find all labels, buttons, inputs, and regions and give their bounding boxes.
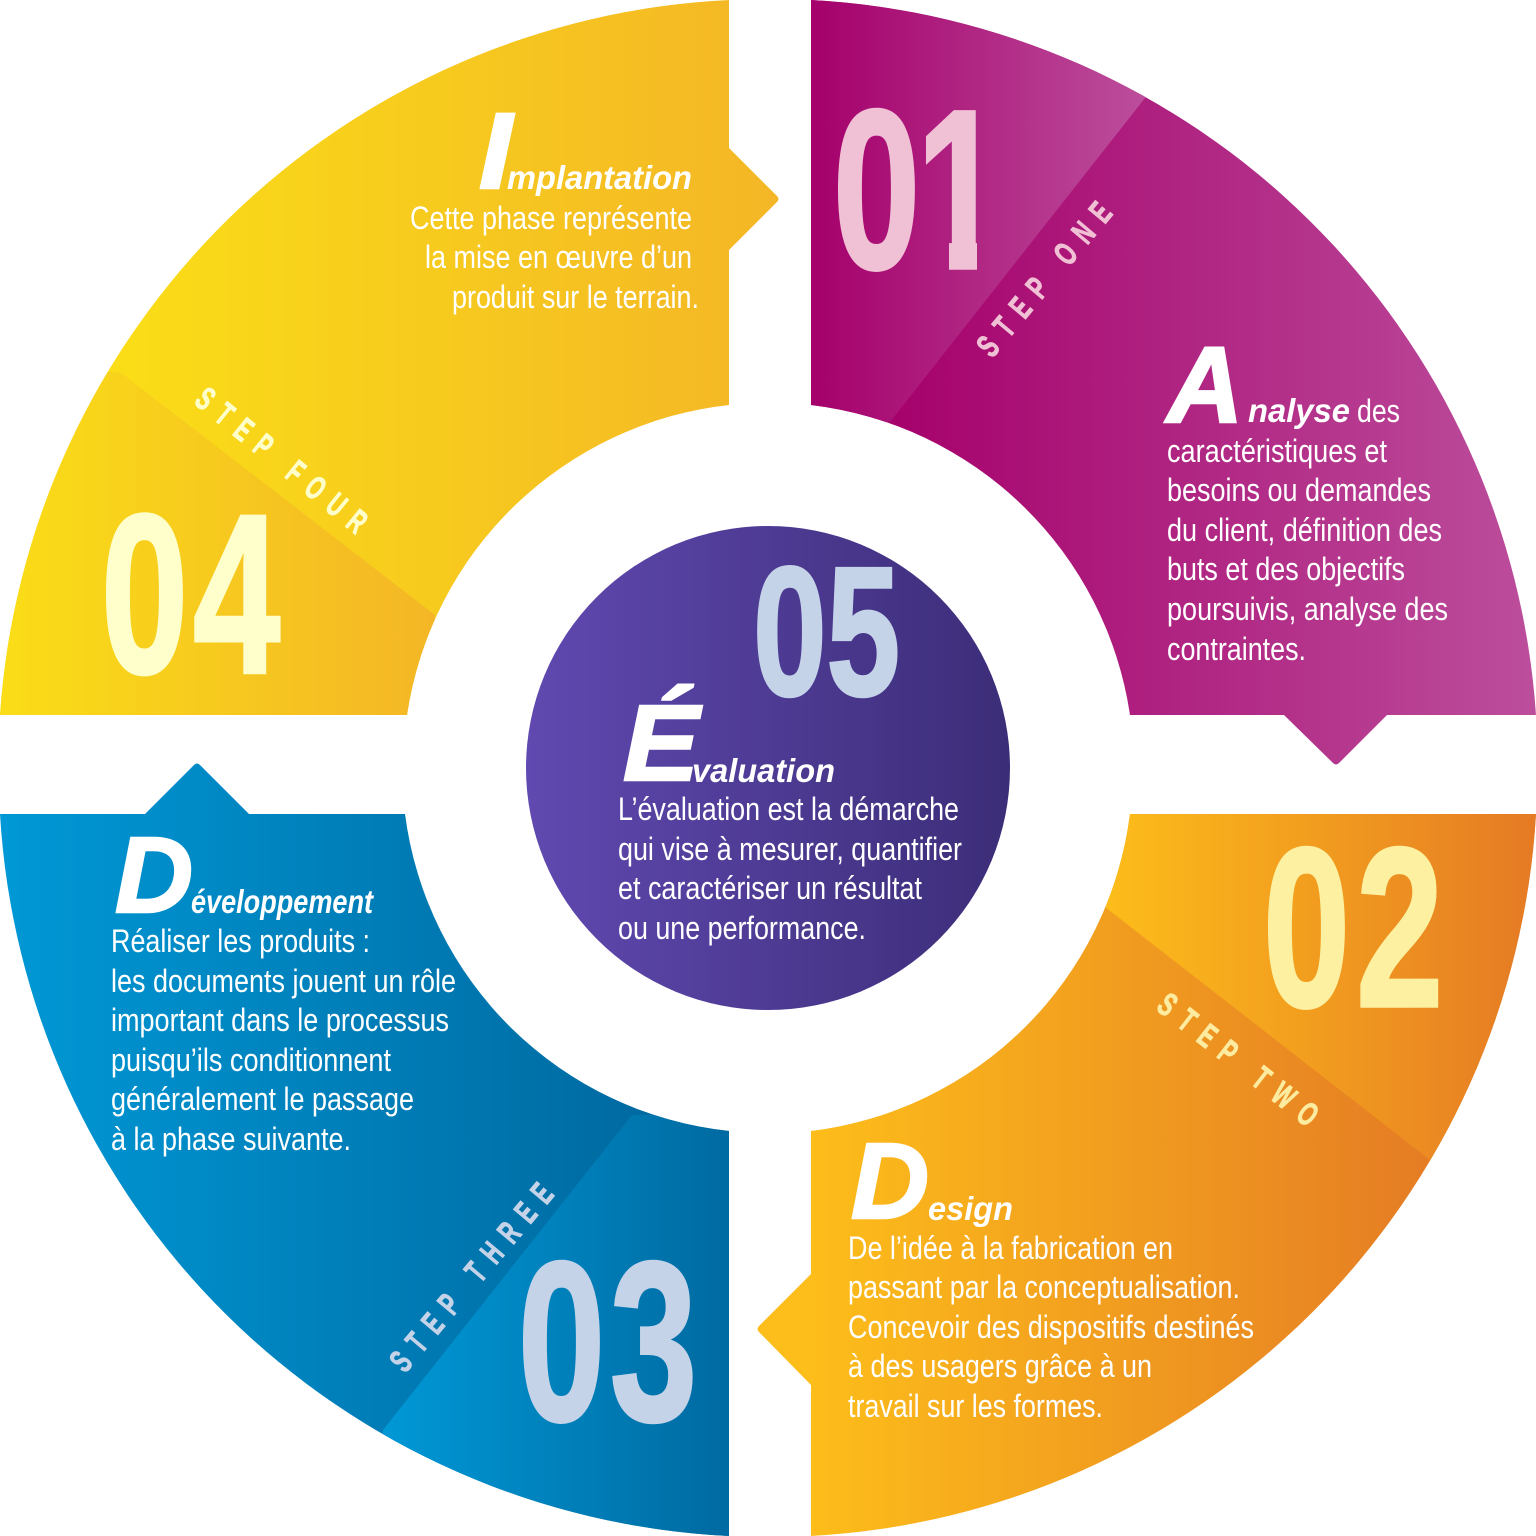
- text block evaluation: L’évaluation est la démarche: [618, 791, 959, 827]
- segment shape three: [0, 764, 729, 1536]
- panel: step four, implantation: [0, 0, 778, 721]
- text block analyse: caractéristiques et: [1167, 433, 1387, 469]
- number 01: 01: [833, 63, 1004, 317]
- heading analyse: A: [1164, 324, 1243, 445]
- heading evaluation: valuation: [692, 752, 835, 789]
- text block evaluation: et caractériser un résultat: [618, 870, 922, 906]
- text block evaluation: [618, 791, 962, 946]
- heading analyse: des: [1357, 393, 1400, 429]
- text block analyse: besoins ou demandes: [1167, 472, 1431, 508]
- text block implantation: Cette phase représente: [410, 200, 692, 236]
- text block design: travail sur les formes.: [848, 1388, 1103, 1424]
- heading analyse: [1164, 324, 1400, 445]
- text block evaluation: ou une performance.: [618, 910, 866, 946]
- text block evaluation: qui vise à mesurer, quantifier: [618, 831, 962, 867]
- text block analyse: buts et des objectifs: [1167, 551, 1405, 587]
- lighter band four: [0, 372, 435, 715]
- text block developpement: à la phase suivante.: [111, 1121, 351, 1157]
- panel: step three, developpement: [0, 764, 729, 1536]
- lighter band one: [811, 0, 1145, 422]
- number 05: 05: [753, 529, 900, 734]
- heading evaluation: [623, 682, 835, 803]
- heading design: esign: [928, 1190, 1013, 1227]
- text block developpement: les documents jouent un rôle: [111, 963, 456, 999]
- text block design: [848, 1230, 1254, 1424]
- heading evaluation: É: [623, 682, 702, 803]
- text block developpement: généralement le passage: [111, 1081, 414, 1117]
- text block implantation: produit sur le terrain.: [452, 279, 699, 315]
- text block design: De l’idée à la fabrication en: [848, 1230, 1173, 1266]
- heading implantation: I: [479, 90, 514, 211]
- text block developpement: Réaliser les produits :: [111, 923, 370, 959]
- label step four: STEP FOUR: [189, 380, 384, 548]
- heading implantation: [479, 90, 692, 211]
- panel: step two, design: [758, 801, 1536, 1536]
- segment shape four: [0, 0, 778, 715]
- text block analyse: [1167, 433, 1448, 667]
- text block analyse: du client, définition des: [1167, 512, 1442, 548]
- text block design: Concevoir des dispositifs destinés: [848, 1309, 1254, 1345]
- text block analyse: contraintes.: [1167, 631, 1306, 667]
- panel: step five, evaluation: [526, 526, 1010, 1010]
- label step three: STEP THREE: [382, 1167, 568, 1378]
- segment shape one: [811, 0, 1536, 764]
- label step two: STEP TWO: [1151, 985, 1335, 1141]
- text block analyse: poursuivis, analyse des: [1167, 591, 1448, 627]
- lighter band two: [1105, 814, 1536, 1160]
- segment shape two: [758, 814, 1536, 1536]
- label step one: STEP ONE: [969, 186, 1127, 363]
- text block design: à des usagers grâce à un: [848, 1348, 1152, 1384]
- number 02: 02: [1263, 801, 1443, 1055]
- lighter band three: [383, 1115, 729, 1536]
- heading implantation: mplantation: [507, 159, 692, 196]
- text block design: passant par la conceptualisation.: [848, 1269, 1240, 1305]
- heading developpement: éveloppement: [191, 883, 375, 920]
- number 04: 04: [101, 468, 280, 721]
- heading design: [851, 1120, 1013, 1241]
- text block developpement: important dans le processus: [111, 1002, 449, 1038]
- text block developpement: puisqu’ils conditionnent: [111, 1042, 391, 1078]
- text block developpement: [111, 923, 456, 1157]
- heading design: D: [851, 1120, 929, 1241]
- number 03: 03: [518, 1215, 697, 1469]
- heading developpement: D: [115, 814, 193, 935]
- panel: step one, analyse: [811, 0, 1536, 764]
- heading developpement: [115, 814, 375, 935]
- text block implantation: [410, 200, 699, 315]
- text block implantation: la mise en œuvre d’un: [425, 239, 692, 275]
- heading analyse: nalyse: [1248, 392, 1350, 429]
- center circle: [526, 526, 1010, 1010]
